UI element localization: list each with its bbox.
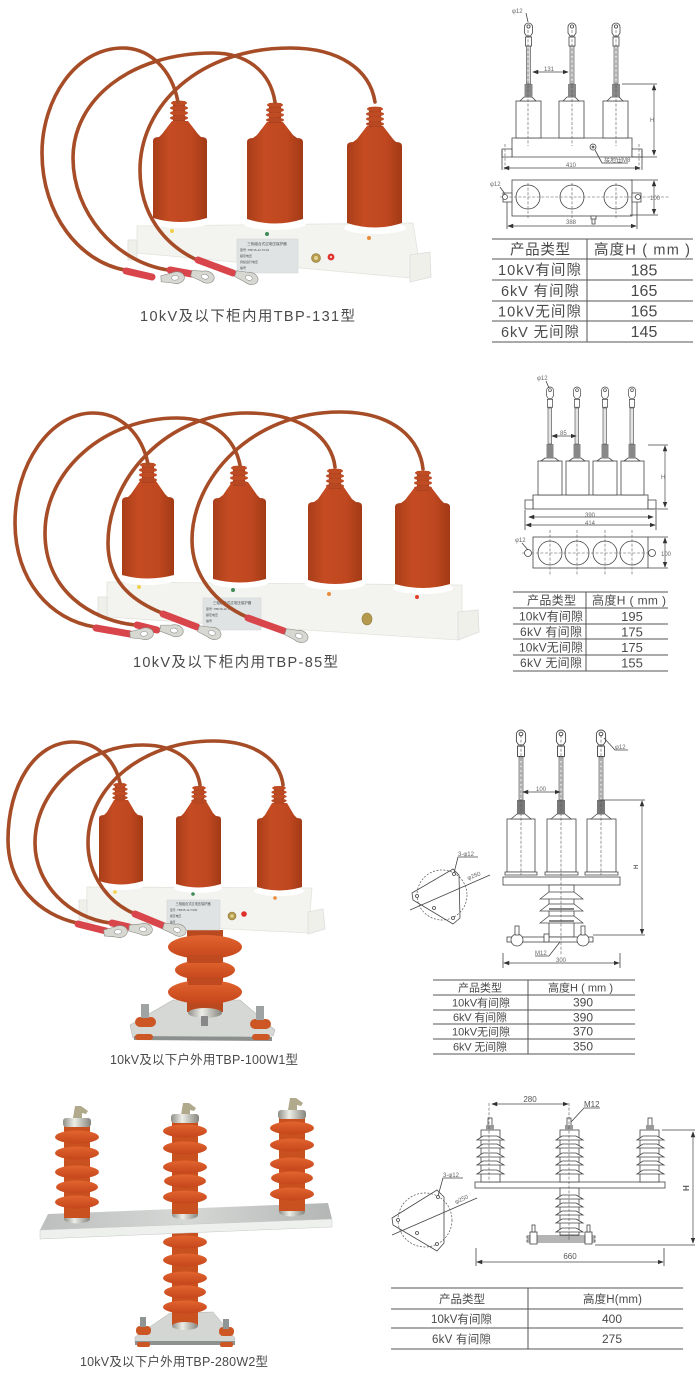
neck ribs <box>139 463 157 483</box>
diagram: TBP-131 drawing: H <box>650 118 654 124</box>
nameplate <box>237 239 298 273</box>
diagram: TBP-280W2 drawing: 660 <box>563 1252 577 1261</box>
mounting ears <box>98 597 479 640</box>
table: TBP-131 heights: 185 <box>631 262 657 280</box>
cables <box>15 412 423 645</box>
table: TBP-131 heights: 10kV有间隙 <box>498 262 581 279</box>
nameplate: 三相组合式过电压保护器 <box>175 901 211 906</box>
base housing <box>137 223 418 278</box>
diagram: TBP-131 drawing: 388 <box>566 220 577 226</box>
table: TBP-85 heights: 10kV无间隙 <box>519 640 583 654</box>
bolts <box>135 1004 271 1040</box>
nameplate: 编号 <box>240 265 246 270</box>
table: TBP-85 heights: 175 <box>621 624 643 640</box>
cylinders <box>99 800 302 890</box>
mounting plate <box>130 1000 275 1041</box>
base housing <box>86 887 312 933</box>
table: TBP-100W1 heights: 10kV无间隙 <box>452 1024 510 1038</box>
ground screw and lamp <box>228 911 247 920</box>
table: TBP-131 heights: 6kV 有间隙 <box>501 283 579 300</box>
diagram: TBP-85 drawing: 390 <box>585 513 596 519</box>
table: TBP-100W1 heights: 350 <box>573 1040 593 1054</box>
diagram: TBP-131 drawing: φ12 <box>490 182 501 188</box>
diagram: TBP-100W1 drawing <box>410 730 645 968</box>
status lamps <box>137 585 419 599</box>
lower arrester <box>135 1233 235 1345</box>
diagram: TBP-85 drawing: φ12 <box>515 538 526 544</box>
table: TBP-280W2 heights: 6kV 有间隙 <box>432 1332 492 1346</box>
nameplate: 额定电压 <box>170 914 181 918</box>
status lamps <box>113 890 277 900</box>
centre stack <box>556 1118 583 1182</box>
table: TBP-100W1 heights: 6kV 有间隙 <box>453 1010 507 1024</box>
table: TBP-100W1 heights: 10kV有间隙 <box>452 996 510 1010</box>
cables <box>42 48 375 287</box>
diagram: TBP-85 drawing: 100 <box>661 552 672 558</box>
diagram: TBP-280W2 drawing <box>392 1095 695 1266</box>
diagram: TBP-131 drawing: 410 <box>566 163 577 169</box>
table: TBP-280W2 heights: 10kV有间隙 <box>431 1312 492 1326</box>
table: TBP-85 heights: 155 <box>621 656 643 670</box>
ground screw and lamp <box>312 254 334 262</box>
table: TBP-131 heights: 10kV无间隙 <box>498 304 581 320</box>
nameplate: 编号 <box>170 920 176 924</box>
table: TBP-85 heights: 175 <box>621 640 643 655</box>
mounting plate plan view <box>392 1173 477 1251</box>
mounting ears <box>79 900 325 934</box>
table: TBP-100W1 heights: 390 <box>573 996 593 1010</box>
diagram: TBP-131 drawing: 100 <box>650 196 661 202</box>
mounting ears <box>128 240 431 282</box>
table: TBP-85 heights: 10kV有间隙 <box>519 610 583 624</box>
caption: TBP-280W2: 10kV及以下户外用TBP-280W2型 <box>80 1354 268 1369</box>
diagram: TBP-131 drawing <box>490 9 670 229</box>
caption: TBP-100W1: 10kV及以下户外用TBP-100W1型 <box>110 1052 298 1067</box>
diagram: TBP-100W1 drawing: 100 <box>536 787 547 793</box>
diagram: TBP-85 drawing: 85 <box>560 431 567 437</box>
caption: TBP-85: 10kV及以下柜内用TBP-85型 <box>133 654 338 671</box>
table: TBP-280W2 heights: 产品类型 <box>439 1292 485 1306</box>
table: TBP-100W1 heights: 高度H ( mm ) <box>548 980 613 994</box>
mounting plate plan view: 3-φ12 <box>443 1173 460 1179</box>
nameplate: 三相组合式过电压保护器 <box>247 241 287 246</box>
table: TBP-100W1 heights: 产品类型 <box>458 980 502 994</box>
diagram: TBP-280W2 drawing: 280 <box>523 1095 537 1104</box>
status lamps <box>170 229 371 240</box>
table: TBP-280W2 heights: 275 <box>602 1332 622 1346</box>
table: TBP-85 heights: 产品类型 <box>527 594 576 608</box>
neck ribs <box>112 783 128 800</box>
panel: TBP-100W1 product photo <box>8 741 325 1041</box>
table: TBP-131 heights: 高度H ( mm ) <box>594 242 690 258</box>
nameplate: 型号: TBP-B-12.7/100 <box>170 908 198 912</box>
table: TBP-100W1 heights <box>433 980 635 1054</box>
mounting plate plan view: φ250 <box>454 1194 470 1206</box>
panel: TBP-85 product photo <box>15 412 479 645</box>
nameplate <box>167 900 220 930</box>
table: TBP-85 heights <box>513 592 668 671</box>
table: TBP-280W2 heights: 高度H(mm) <box>583 1292 642 1306</box>
table: TBP-100W1 heights: 6kV 无间隙 <box>453 1040 507 1054</box>
neck ribs <box>170 101 188 121</box>
insulator <box>168 930 242 1018</box>
nameplate: 持续运行电压 <box>240 259 258 264</box>
lower stack <box>527 1188 595 1244</box>
diagram: TBP-131 drawing: 131 <box>544 67 555 73</box>
right arrester <box>270 1098 314 1216</box>
nameplate: 额定电压 <box>206 612 218 617</box>
collars <box>120 573 453 594</box>
diagram: TBP-100W1 drawing: 300 <box>556 958 567 964</box>
diagram: TBP-131 drawing: 接地钮M8 <box>604 156 631 164</box>
diagram: TBP-85 drawing: φ12 <box>537 376 548 382</box>
nameplate: 型号: TBP-B-12.7/131 <box>240 247 270 252</box>
table: TBP-131 heights: 145 <box>631 324 657 341</box>
diagram: TBP-280W2 drawing: H <box>682 1185 691 1191</box>
table: TBP-85 heights: 6kV 无间隙 <box>520 656 582 670</box>
cylinders <box>122 481 450 588</box>
table: TBP-85 heights: 195 <box>621 609 643 624</box>
plate bolts <box>136 1317 234 1347</box>
centre arrester upper <box>163 1103 207 1220</box>
table: TBP-100W1 heights: 370 <box>573 1024 593 1038</box>
table: TBP-280W2 heights: 400 <box>602 1312 622 1326</box>
table: TBP-131 heights: 产品类型 <box>510 242 570 258</box>
table: TBP-131 heights: 6kV 无间隙 <box>501 324 579 341</box>
table: TBP-85 heights: 6kV 有间隙 <box>520 625 582 639</box>
table: TBP-100W1 heights: 390 <box>573 1010 593 1024</box>
collars <box>150 216 406 234</box>
table: TBP-131 heights: 165 <box>631 283 657 300</box>
mounting plate plan view <box>410 852 490 924</box>
nameplate: 额定电压 <box>240 253 252 258</box>
left arrester <box>55 1106 99 1224</box>
collars <box>97 880 304 896</box>
diagram: TBP-280W2 drawing: M12 <box>584 1100 600 1109</box>
diagram: TBP-85 drawing: 414 <box>585 521 596 527</box>
table: TBP-131 heights: 165 <box>631 304 657 320</box>
nameplate: 编号 <box>206 618 212 623</box>
table: TBP-280W2 heights <box>391 1288 683 1349</box>
diagram: TBP-85 drawing: H <box>661 475 665 481</box>
mounting plate plan view: φ250 <box>467 871 482 882</box>
cylinders <box>153 121 402 228</box>
diagram: TBP-100W1 drawing: φ12 <box>615 745 626 751</box>
caption: TBP-131: 10kV及以下柜内用TBP-131型 <box>140 308 355 325</box>
mounting plate plan view: 3-φ12 <box>458 852 475 858</box>
table: TBP-131 heights <box>492 239 693 342</box>
crossbar <box>40 1203 332 1239</box>
table: TBP-85 heights: 高度H ( mm ) <box>592 592 666 608</box>
diagram: TBP-131 drawing: φ12 <box>512 9 523 15</box>
panel: TBP-280W2 product photo <box>40 1098 332 1347</box>
left stack <box>477 1118 504 1182</box>
nameplate <box>203 598 261 630</box>
base housing <box>107 582 462 640</box>
diagram: TBP-85 drawing <box>515 376 672 575</box>
cables <box>8 741 283 939</box>
diagram: TBP-100W1 drawing: H <box>634 865 640 869</box>
right stack <box>637 1118 664 1182</box>
panel: TBP-131 product photo <box>42 48 431 287</box>
nameplate: 三相组合式过电压保护器 <box>213 600 252 605</box>
diagram: TBP-100W1 drawing: M12 <box>535 951 547 957</box>
ground screw <box>362 613 372 625</box>
nameplate: 型号: TBP-B-12.7/85 <box>206 606 234 611</box>
